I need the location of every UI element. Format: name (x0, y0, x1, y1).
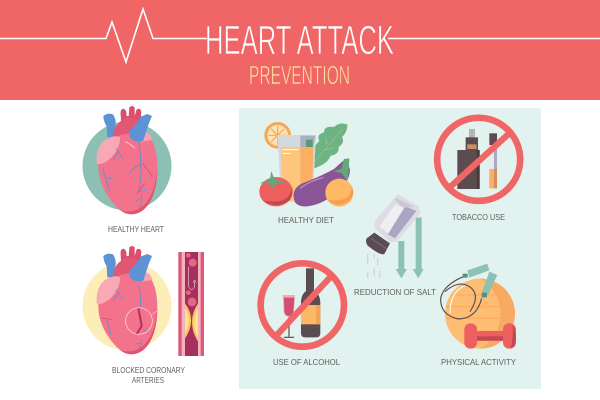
panel: blocked coronary arteries (82, 246, 204, 385)
icon: salt shaker with arrows (366, 194, 424, 278)
panel: use of alcohol (261, 263, 344, 367)
icon: blocked heart (97, 246, 178, 354)
label: blocked coronary arteries: BLOCKED CORONARY (112, 366, 186, 375)
icon: no tobacco (437, 118, 520, 201)
subtitle: PREVENTION (249, 60, 350, 90)
label: healthy diet: HEALTHY DIET (278, 215, 334, 225)
heartbeat line right (388, 38, 600, 40)
title: HEART ATTACK (205, 17, 394, 63)
heartbeat line (0, 9, 207, 62)
yellow circle (82, 262, 172, 350)
panel: prevention background (239, 108, 541, 389)
magnifier (126, 308, 152, 334)
label: healthy heart: HEALTHY HEART (108, 225, 164, 234)
panel: reduction of salt (354, 194, 436, 297)
label: blocked coronary arteries: ARTERIES (132, 376, 164, 385)
label: tobacco use: TOBACCO USE (452, 212, 505, 222)
icon: artery cross-section (178, 252, 204, 356)
panel: tobacco use (437, 118, 520, 222)
header banner (0, 0, 600, 100)
panel: healthy heart (82, 106, 172, 234)
label: physical activity: PHYSICAL ACTIVITY (441, 357, 516, 367)
icon: healthy heart (97, 106, 157, 214)
label: blocked coronary arteries (112, 366, 186, 385)
icon: ball, rope and dumbbell (441, 264, 516, 349)
panel: healthy diet (259, 122, 353, 225)
panel: physical activity (441, 264, 516, 367)
teal circle (82, 122, 172, 210)
icon: no alcohol (261, 263, 344, 347)
icon: food group (259, 122, 353, 207)
label: reduction of salt: REDUCTION OF SALT (354, 287, 436, 297)
label: use of alcohol: USE OF ALCOHOL (273, 357, 340, 367)
